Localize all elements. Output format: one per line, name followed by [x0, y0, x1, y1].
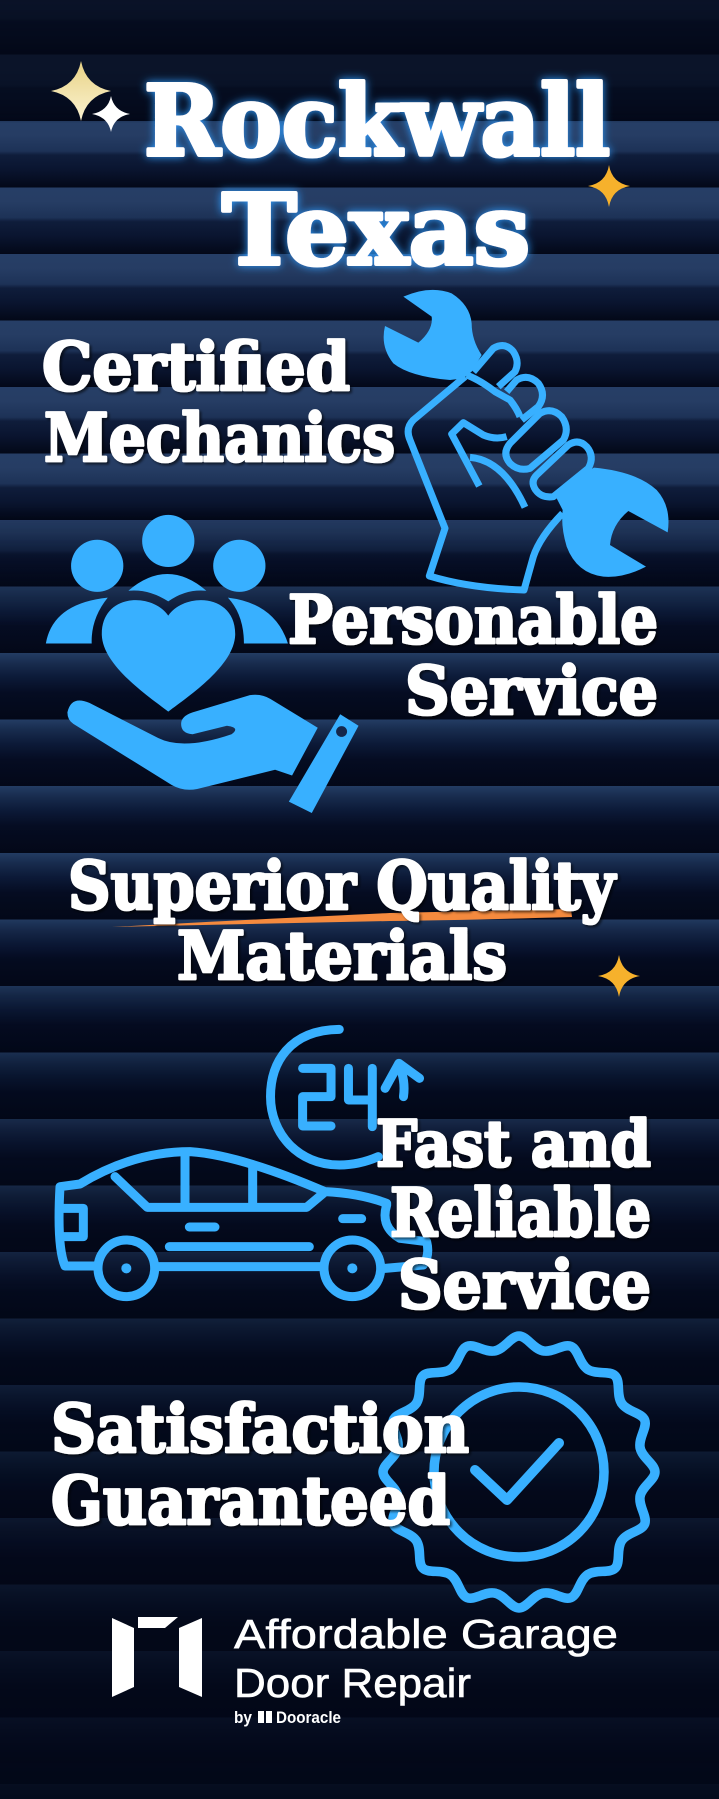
text: personable service: Service — [405, 652, 658, 730]
icon: 24 hour clock — [271, 1029, 420, 1165]
text: certified mechanics — [42, 328, 395, 477]
text: by doorcle — [234, 1708, 341, 1727]
icon: sparkle orange top — [588, 165, 630, 207]
title: Texas — [222, 173, 530, 287]
icon: door logo — [112, 1617, 202, 1697]
text: certified mechanics: Certified — [42, 328, 350, 406]
icon: sparkle white — [92, 96, 130, 132]
text: satisfaction guaranteed: Guaranteed — [51, 1462, 450, 1540]
text: personable service: Personable — [288, 581, 658, 659]
text: personable service — [288, 581, 658, 730]
text: by doorcle: Dooracle — [276, 1708, 341, 1727]
icon: satisfaction badge with check — [383, 1336, 655, 1608]
text: fast and reliable service: Reliable — [390, 1174, 651, 1252]
text: fast and reliable service — [376, 1107, 651, 1324]
icon: sparkle orange middle — [598, 955, 640, 997]
text: fast and reliable service: Fast and — [376, 1107, 651, 1182]
title: Rockwall — [144, 64, 610, 178]
icon: people heart and hand — [46, 515, 359, 813]
text: company name: Affordable Garage — [234, 1611, 618, 1657]
text: superior quality materials — [68, 847, 616, 995]
text: certified mechanics: Mechanics — [44, 399, 395, 477]
text: satisfaction guaranteed: Satisfaction — [51, 1390, 469, 1468]
text: company name: Door Repair — [234, 1660, 471, 1706]
icon: sparkle gold large — [51, 61, 111, 121]
text: satisfaction guaranteed — [51, 1390, 469, 1540]
text: superior quality materials: Materials — [177, 917, 507, 995]
icon: hand gripping wrench — [384, 290, 669, 590]
title — [144, 64, 610, 287]
text: company name — [234, 1611, 618, 1706]
text: superior quality materials: Superior Quality — [68, 847, 616, 925]
icon: car — [59, 1152, 428, 1297]
text: fast and reliable service: Service — [398, 1246, 651, 1324]
text: by doorcle: by — [234, 1708, 252, 1727]
